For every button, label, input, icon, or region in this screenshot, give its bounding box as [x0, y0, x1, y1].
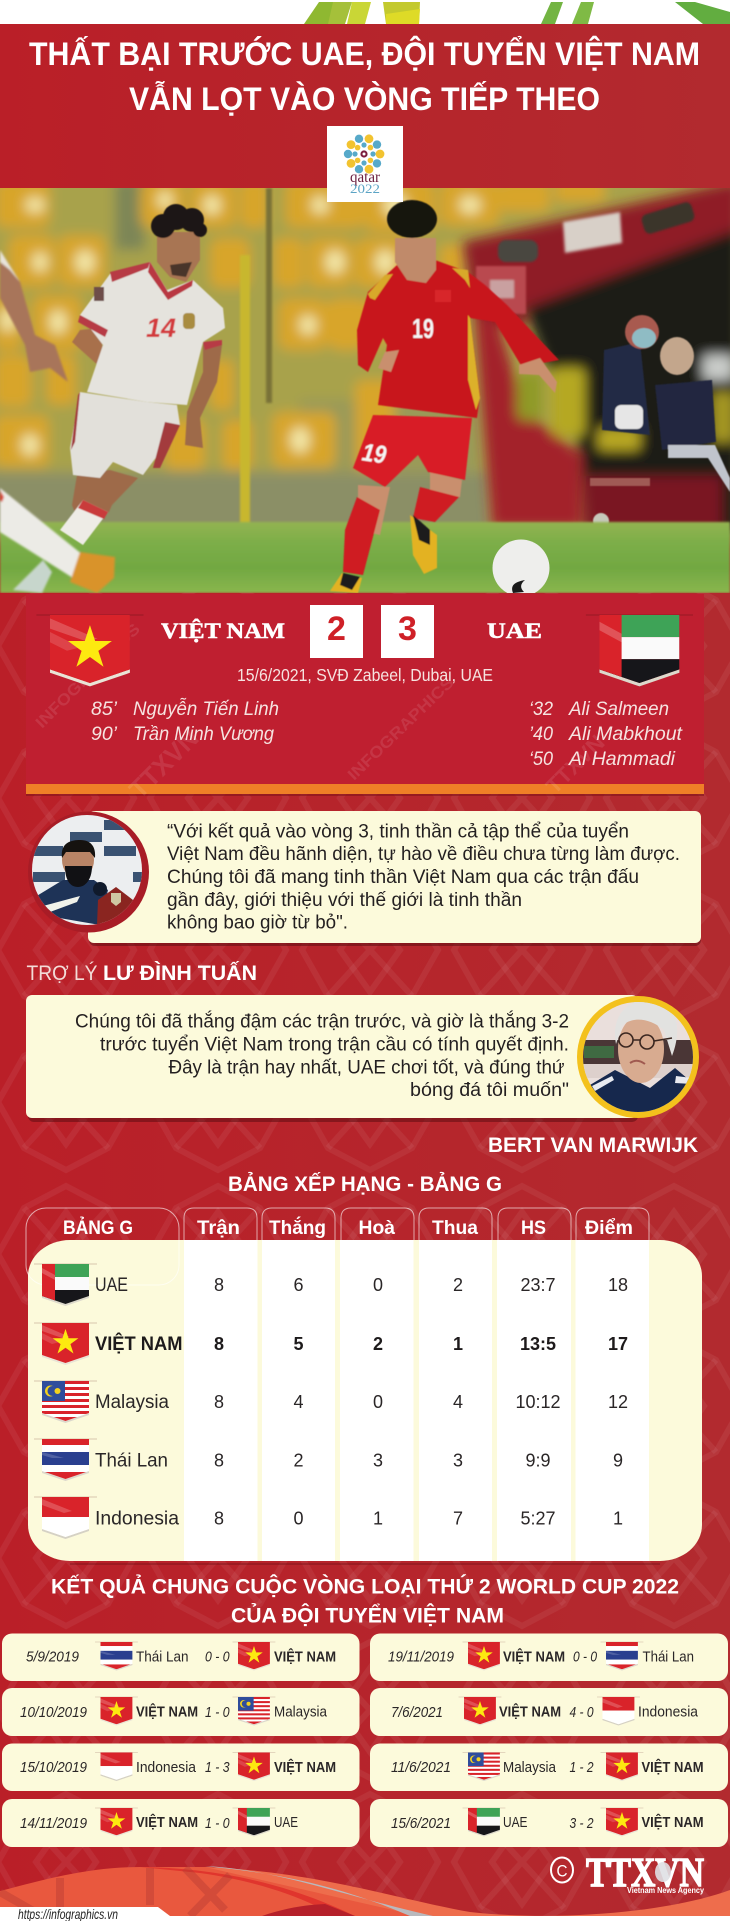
header labels — [63, 1217, 633, 1239]
row: Viet Nam: 2 — [373, 1334, 383, 1354]
match: 11/6/2021: 11/6/2021 — [391, 1760, 451, 1776]
globe on wordmark — [655, 1862, 671, 1882]
Vietnam scorers — [91, 699, 279, 745]
header labels: Thua — [432, 1218, 478, 1239]
score box: 3: 3 — [398, 610, 417, 648]
match: 10/10/2019: VIỆT NAM — [136, 1702, 198, 1720]
watermarks — [33, 621, 610, 804]
match: 11/6/2021 — [370, 1744, 728, 1791]
row: Indonesia: 8 — [214, 1508, 224, 1528]
row: Thailand: 9:9 — [525, 1450, 551, 1470]
title — [29, 36, 700, 117]
header labels: Thắng — [269, 1217, 326, 1239]
watermarks: INFOGRAPHICS — [33, 621, 144, 732]
match: 15/6/2021: 3 - 2 — [570, 1816, 594, 1832]
match: 5/9/2019: Thái Lan — [136, 1650, 188, 1666]
heading: group standings: BẢNG XẾP HẠNG - BẢNG G — [228, 1171, 502, 1196]
UAE scorers — [529, 699, 683, 770]
row: Malaysia: 8 — [214, 1392, 224, 1412]
row: Malaysia: Malaysia — [95, 1392, 169, 1413]
logo: Qatar 2022: 2022 — [350, 181, 380, 196]
portrait: Bert van Marwijk — [577, 996, 699, 1118]
quote text: không bao giờ từ bỏ". — [167, 912, 348, 934]
row: Thailand: 2 — [293, 1450, 304, 1470]
photo: Vietnam vs UAE match — [0, 170, 730, 596]
caption: assistant coach name — [26, 962, 257, 985]
match: 7/6/2021 — [370, 1688, 728, 1736]
header labels: BẢNG G — [63, 1217, 133, 1239]
results: left column — [2, 1634, 360, 1847]
quote card: Bert van Marwijk — [26, 995, 638, 1122]
row: Thailand: 3 — [453, 1450, 463, 1470]
caption: assistant coach name: TRỢ LÝ — [26, 962, 98, 985]
row: UAE: 2 — [453, 1275, 463, 1295]
UAE scorers: Ali Mabkhout — [568, 724, 683, 745]
row: Indonesia: 1 — [373, 1508, 383, 1528]
match: 14/11/2019: VIỆT NAM — [136, 1813, 198, 1831]
score box: 2 — [310, 605, 363, 658]
row: UAE: 8 — [214, 1275, 224, 1295]
header tabs — [26, 1208, 649, 1285]
pitch — [0, 522, 730, 593]
row: Indonesia: 0 — [293, 1508, 304, 1528]
match: 15/6/2021: 15/6/2021 — [391, 1816, 451, 1832]
row: Indonesia: 5:27 — [520, 1508, 556, 1528]
UAE scorers: ‘50 — [529, 749, 553, 770]
quote text: gần đây, giới thiệu với thế giới là tinh thần — [167, 890, 522, 911]
row: Viet Nam — [34, 1323, 628, 1365]
match: 15/6/2021 — [370, 1799, 728, 1847]
heading: final results — [51, 1574, 679, 1628]
panel: match result — [26, 594, 704, 804]
header band — [0, 24, 730, 188]
watermarks: TTXVN — [123, 723, 205, 804]
match: 15/10/2019: 15/10/2019 — [20, 1760, 87, 1776]
copyright mark — [551, 1858, 573, 1882]
agency wordmark: TTXVN — [586, 1849, 704, 1895]
UAE scorers: Ali Salmeen — [568, 699, 669, 720]
match: 14/11/2019: 1 - 0 — [205, 1816, 230, 1832]
match: 10/10/2019: 10/10/2019 — [20, 1705, 87, 1721]
results: right column — [370, 1634, 728, 1847]
table: Group G standings — [26, 1208, 702, 1564]
watermarks: INFOGRAPHICS — [345, 674, 458, 784]
match: 15/10/2019: 1 - 3 — [205, 1760, 230, 1776]
football — [492, 540, 550, 596]
foreground player: arm and leg at left — [0, 250, 115, 593]
match: 10/10/2019: Malaysia — [274, 1704, 328, 1720]
row: Malaysia: 12 — [608, 1392, 628, 1412]
row: Viet Nam: 17 — [608, 1334, 628, 1354]
row: Viet Nam: 5 — [293, 1334, 304, 1354]
match: 5/9/2019 — [2, 1634, 360, 1681]
row: Malaysia: 4 — [453, 1392, 463, 1412]
top white band with green stripes — [0, 0, 730, 24]
match: 19/11/2019: 19/11/2019 — [388, 1650, 454, 1666]
row: UAE: 23:7 — [520, 1275, 556, 1295]
row: UAE: 18 — [608, 1275, 628, 1295]
agency tagline: Vietnam News Agency — [627, 1885, 704, 1895]
match: 7/6/2021: Indonesia — [638, 1704, 699, 1720]
player 19 in red — [330, 200, 559, 593]
match: 15/10/2019: Indonesia — [136, 1760, 197, 1776]
header labels: Hoà — [358, 1218, 395, 1239]
match: 14/11/2019: 14/11/2019 — [20, 1816, 87, 1832]
caption: assistant coach name: LƯ ĐÌNH TUẤN — [103, 962, 257, 985]
header labels: HS — [521, 1218, 546, 1239]
Vietnam scorers: 90’ — [91, 724, 118, 745]
title: VẪN LỌT VÀO VÒNG TIẾP THEO — [129, 81, 600, 117]
match: 15/10/2019: VIỆT NAM — [274, 1758, 336, 1776]
match: 11/6/2021: VIỆT NAM — [642, 1758, 704, 1776]
footer wave — [0, 1866, 730, 1921]
header labels: Điểm — [585, 1218, 633, 1239]
match: 7/6/2021: VIỆT NAM — [499, 1702, 561, 1720]
quote text: “Với kết quả vào vòng 3, tinh thần cả tập thể của tuyển — [167, 822, 629, 842]
quote text — [167, 822, 680, 934]
player 14 in white: 14 — [146, 313, 176, 343]
score box: 3 — [381, 605, 434, 658]
row: Thailand: 8 — [214, 1450, 224, 1470]
Vietnam scorers: Trần Minh Vương — [133, 724, 274, 745]
match: 15/10/2019 — [2, 1744, 360, 1791]
Vietnam scorers: 85’ — [91, 699, 118, 720]
row: Viet Nam: 13:5 — [520, 1334, 556, 1354]
row: UAE: 0 — [373, 1275, 383, 1295]
match: 14/11/2019 — [2, 1799, 360, 1847]
match: 5/9/2019: 0 - 0 — [205, 1650, 230, 1666]
match: 19/11/2019 — [370, 1634, 728, 1681]
quote text: Việt Nam đều hãnh diện, tự hào về điều chưa từng làm được. — [167, 844, 680, 865]
team name: Viet Nam: VIỆT NAM — [161, 618, 285, 643]
dugout — [463, 180, 730, 532]
logo: TTXVN Vietnam News Agency — [551, 1849, 704, 1895]
row: Thailand: 9 — [613, 1450, 623, 1470]
quote text: Chúng tôi đã mang tinh thần Việt Nam qua các trận đấu — [167, 867, 639, 888]
UAE scorers: ’40 — [529, 724, 553, 745]
quote text: Đây là trận hay nhất, UAE chơi tốt, và đúng thứ — [168, 1058, 565, 1078]
row: Viet Nam: 8 — [214, 1334, 224, 1354]
row: Thailand: Thái Lan — [95, 1450, 168, 1472]
match: 5/9/2019: 5/9/2019 — [26, 1650, 79, 1666]
match: 7/6/2021: 7/6/2021 — [391, 1705, 443, 1721]
match: 14/11/2019: UAE — [274, 1815, 298, 1831]
match: 11/6/2021: 1 - 2 — [570, 1760, 594, 1776]
title: THẤT BẠI TRƯỚC UAE, ĐỘI TUYỂN VIỆT NAM — [29, 36, 700, 72]
watermarks: TTXVN — [541, 730, 610, 799]
row: Malaysia: 10:12 — [515, 1392, 561, 1412]
UAE scorers: Al Hammadi — [568, 749, 676, 770]
row: UAE: 6 — [293, 1275, 304, 1295]
portrait: assistant coach Lu Dinh Tuan — [28, 812, 149, 932]
match: 5/9/2019: VIỆT NAM — [274, 1648, 336, 1666]
row: Thailand — [34, 1439, 623, 1481]
stadium background — [0, 170, 730, 540]
row: UAE: UAE — [95, 1275, 128, 1296]
match: 19/11/2019: VIỆT NAM — [503, 1648, 565, 1666]
header labels: Trận — [197, 1218, 240, 1239]
match: 19/11/2019: Thái Lan — [642, 1650, 694, 1666]
flag: Vietnam — [36, 615, 144, 686]
logo: Qatar 2022 — [327, 126, 403, 202]
row: Indonesia — [34, 1497, 623, 1539]
white columns — [184, 1240, 649, 1561]
match: 10/10/2019 — [2, 1688, 360, 1736]
heading: final results: CỦA ĐỘI TUYỂN VIỆT NAM — [231, 1604, 504, 1628]
row: Malaysia: 4 — [293, 1392, 304, 1412]
flag: UAE — [586, 615, 693, 686]
logo wordmark: qatar — [350, 169, 381, 186]
team name: UAE: UAE — [487, 618, 542, 643]
quote text: bóng đá tôi muốn" — [410, 1080, 569, 1101]
player 14 in white — [60, 204, 225, 545]
quote card: assistant coach — [88, 811, 701, 946]
match: 15/6/2021: VIỆT NAM — [642, 1813, 704, 1831]
match: 7/6/2021: 4 - 0 — [570, 1705, 594, 1721]
copyright mark: C — [556, 1862, 568, 1880]
row: UAE — [34, 1264, 628, 1306]
player 19 in red: 19 — [360, 438, 388, 470]
quote text — [75, 1010, 569, 1101]
row: Indonesia: 1 — [613, 1508, 623, 1528]
row: Viet Nam: VIỆT NAM — [95, 1333, 182, 1355]
row: Viet Nam: 1 — [453, 1334, 463, 1354]
UAE scorers: ‘32 — [529, 699, 553, 720]
match: 19/11/2019: 0 - 0 — [573, 1650, 597, 1666]
match date and venue: 15/6/2021, SVĐ Zabeel, Dubai, UAE — [237, 665, 493, 685]
row: Indonesia: 7 — [453, 1508, 463, 1528]
row: Indonesia: Indonesia — [95, 1508, 179, 1530]
row: Malaysia — [34, 1381, 628, 1423]
Vietnam scorers: Nguyễn Tiến Linh — [133, 699, 279, 720]
heading: final results: KẾT QUẢ CHUNG CUỘC VÒNG LOẠI THỨ 2 WORLD CUP 2022 — [51, 1574, 679, 1598]
match: 11/6/2021: Malaysia — [503, 1760, 557, 1776]
row: Malaysia: 0 — [373, 1392, 383, 1412]
player 19 in red: 19 — [412, 313, 434, 344]
match: 10/10/2019: 1 - 0 — [205, 1705, 230, 1721]
caption: Bert van Marwijk: BERT VAN MARWIJK — [488, 1134, 698, 1157]
score box: 2: 2 — [327, 610, 346, 648]
quote text: Chúng tôi đã thắng đậm các trận trước, và giờ là thắng 3-2 — [75, 1010, 569, 1032]
row: Thailand: 3 — [373, 1450, 383, 1470]
quote text: trước tuyển Việt Nam trong trận cầu có tính quyết định. — [100, 1034, 569, 1056]
match: 15/6/2021: UAE — [503, 1815, 528, 1831]
